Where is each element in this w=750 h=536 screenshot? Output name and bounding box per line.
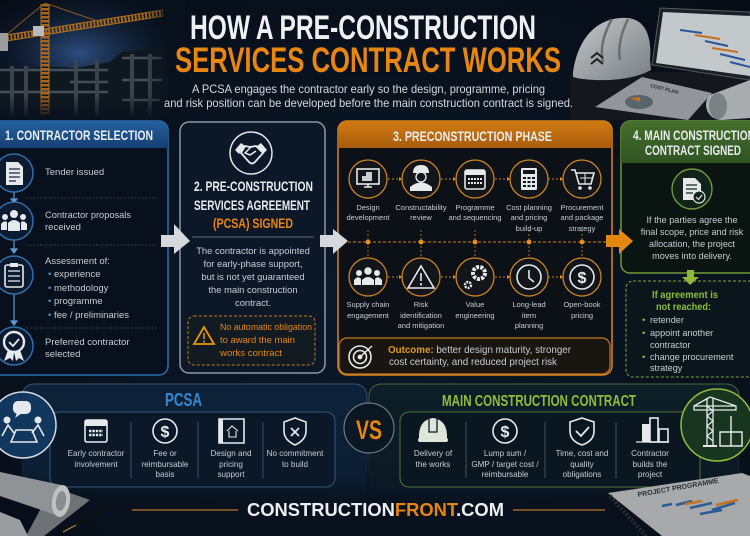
labels: PCSA features: Design and <box>211 449 251 458</box>
labels: upper row: build-up <box>516 224 542 233</box>
callout: no automatic obligation <box>188 316 315 365</box>
labels: PCSA features: No commitment <box>267 449 324 458</box>
icon: fee dollar: $ <box>161 424 170 441</box>
labels: lower row: Open-book <box>563 300 601 309</box>
labels: lower row: engagement <box>347 311 390 320</box>
panel: 2 PCSA signed <box>180 122 325 373</box>
subtitle: A PCSA engages the contractor early so the design, programme, pricing <box>192 82 545 96</box>
text: step list: • <box>48 269 51 280</box>
text: delivery description <box>641 215 744 261</box>
text: step list: Contractor proposals <box>45 210 131 221</box>
icon: calendar <box>456 160 494 198</box>
labels: upper row: development <box>347 213 390 222</box>
labels: upper row: Cost planning <box>506 203 552 212</box>
heading: PCSA signed: SERVICES AGREEMENT <box>194 197 310 213</box>
labels: main contract features: Time, cost and <box>556 449 608 458</box>
labels: main contract features: Lump sum / <box>484 449 527 458</box>
labels: PCSA features: support <box>218 470 245 479</box>
labels: lower row: item <box>522 311 536 320</box>
labels: PCSA features: basis <box>156 470 174 479</box>
footer: website: CONSTRUCTIONFRONT.COM <box>247 499 504 520</box>
labels: upper row: review <box>410 213 432 222</box>
text: step list: methodology <box>54 283 109 294</box>
callout: if agreement is not reached: contractor <box>650 340 690 350</box>
labels: main contract features: obligations <box>563 470 601 479</box>
text: step list: Tender issued <box>45 167 104 178</box>
heading: PCSA signed <box>194 178 313 231</box>
icon: award badge <box>0 327 33 365</box>
labels: lower row: and mitigation <box>398 321 444 330</box>
labels: main contract features: Contractor <box>631 449 669 458</box>
labels: upper row: and pricing <box>511 213 547 222</box>
icon: document <box>0 154 33 192</box>
text: step list: • <box>48 310 51 321</box>
icon: handshake <box>230 132 272 174</box>
text: step list: experience <box>54 269 100 280</box>
icon: risk triangle <box>402 258 440 296</box>
callout: if agreement is not reached: retender <box>650 315 684 325</box>
text: step list: selected <box>45 349 80 360</box>
panel: PCSA comparison <box>22 384 367 500</box>
callout: if agreement is not reached: • <box>642 315 645 326</box>
labels: upper row: Procurement <box>561 203 604 212</box>
arrow: preconstruction to main contract <box>606 229 633 254</box>
image: construction site with tower crane <box>0 0 190 119</box>
icon: lump sum dollar <box>493 419 517 443</box>
badge: VS <box>344 403 394 453</box>
text: step list: received <box>45 222 81 233</box>
labels: upper row: Constructability <box>395 203 447 212</box>
labels: lower row: pricing <box>571 311 593 320</box>
text: step list: Assessment of: <box>45 256 110 267</box>
callout: no automatic obligation: to award the main <box>220 335 295 346</box>
icon: blueprint <box>219 419 244 443</box>
text: delivery description: moves into delivery. <box>652 251 732 261</box>
labels: upper row: and sequencing <box>449 213 501 222</box>
text: PCSA description: the main construction <box>208 284 298 295</box>
title <box>175 9 561 80</box>
callout: if agreement is not reached <box>626 281 750 377</box>
icon: no commitment shield <box>284 418 306 445</box>
labels: lower row: engineering <box>455 311 495 320</box>
icon: design development <box>349 160 387 198</box>
panel: 3 preconstruction phase <box>338 121 612 375</box>
labels: main contract features: builds the <box>633 460 668 469</box>
icon: clipboard <box>0 256 33 294</box>
icon: buildings <box>636 418 669 442</box>
icon: early involvement calendar <box>85 420 107 442</box>
callout: if agreement is not reached: change procurement <box>650 352 734 362</box>
callout: if agreement is not reached: strategy <box>650 363 683 373</box>
icon: meeting around plans <box>0 392 56 458</box>
arrow: selection to PCSA <box>161 224 190 254</box>
icon: people <box>0 202 33 240</box>
icon: supply chain people <box>349 258 387 296</box>
callout: outcome: cost certainty, and reduced project risk <box>389 356 558 368</box>
text: step list: fee / preliminaries <box>54 310 129 321</box>
timeline: central dashed spine <box>338 177 606 279</box>
labels: main contract features: quality <box>570 460 595 469</box>
text: step list: Preferred contractor <box>45 337 129 348</box>
labels: lower row: identification <box>400 311 442 320</box>
icon: constructability review <box>402 160 440 198</box>
heading: main contract signed <box>633 128 750 158</box>
labels: main contract features: GMP / target cost / <box>471 460 539 469</box>
text: delivery description: allocation, the project <box>649 239 735 249</box>
image: hard hat, laptop and cost plan <box>570 8 750 120</box>
labels: lower row <box>347 300 601 330</box>
icon: crane and building <box>681 389 750 461</box>
heading: PCSA: PCSA <box>165 390 202 410</box>
icon: gears <box>456 258 494 296</box>
text: step list <box>45 167 131 360</box>
labels: lower row: planning <box>515 321 543 330</box>
subtitle: and risk position can be developed before the main construction contract is signed. <box>164 96 573 110</box>
labels: PCSA features: Fee or <box>153 449 177 458</box>
labels: upper row: strategy <box>569 224 596 233</box>
heading: PCSA signed: (PCSA) SIGNED <box>213 215 293 231</box>
callout: outcome <box>339 338 610 374</box>
callout: if agreement is not reached: • <box>642 328 645 339</box>
labels: lower row: Supply chain <box>347 300 389 309</box>
title: SERVICES CONTRACT WORKS <box>175 41 561 80</box>
icon: quality shield <box>570 418 594 445</box>
image: hard hat, laptop and cost plan: COST PLAN <box>650 83 679 96</box>
arrow: PCSA to preconstruction <box>320 229 348 254</box>
labels: PCSA features: reimbursable <box>142 460 189 469</box>
subtitle <box>164 82 573 110</box>
panel: 4 main construction contract signed <box>621 121 750 273</box>
labels: PCSA features: pricing <box>219 460 243 469</box>
icon: lump sum dollar: $ <box>501 424 510 441</box>
text: PCSA description <box>196 245 310 308</box>
labels: upper row: Programme <box>455 203 495 212</box>
callout: if agreement is not reached: appoint another <box>650 328 713 338</box>
image: project programme notebook <box>608 473 750 536</box>
icon: dollar: $ <box>578 270 587 287</box>
heading: preconstruction phase: 3. PRECONSTRUCTION PHASE <box>393 128 552 144</box>
icon: helmet <box>418 418 448 442</box>
text: PCSA description: for early-phase support, <box>203 258 303 269</box>
callout: if agreement is not reached: If agreement is <box>652 290 718 301</box>
labels: main contract features <box>414 449 669 479</box>
icon: calculator <box>510 160 548 198</box>
timeline connector <box>11 192 17 325</box>
labels: PCSA features: Early contractor <box>68 449 125 458</box>
labels: upper row <box>347 203 604 233</box>
panel: main construction contract comparison <box>369 384 739 500</box>
text: PCSA description: but is not yet guaranteed <box>201 271 305 282</box>
panel: 1 contractor selection <box>0 121 168 375</box>
labels: PCSA features: involvement <box>74 460 118 469</box>
text: step list: • <box>48 283 51 294</box>
text: delivery description: final scope, price and risk <box>641 227 744 237</box>
heading: PCSA signed: 2. PRE-CONSTRUCTION <box>194 178 313 194</box>
text: PCSA description: The contractor is appointed <box>196 245 310 256</box>
icon: clock <box>510 258 548 296</box>
icon: signed document <box>672 169 712 209</box>
image: project programme notebook: PROJECT PROGRAMME <box>637 478 719 499</box>
callout: no automatic obligation: No automatic obligation <box>220 322 312 333</box>
labels: main contract features: project <box>638 470 663 479</box>
labels: PCSA features: to build <box>282 460 308 469</box>
text: delivery description: If the parties agree the <box>646 215 738 225</box>
text: PCSA description: contract. <box>235 297 271 308</box>
text: step list: • <box>48 296 51 307</box>
icon: shopping cart <box>563 160 601 198</box>
image: rolled blueprints and pen <box>0 472 112 536</box>
callout: if agreement is not reached: • <box>642 352 645 363</box>
text: step list: programme <box>54 296 103 307</box>
labels: PCSA features <box>68 449 324 479</box>
callout: outcome: Outcome: better design maturity, stronger <box>388 344 571 356</box>
labels: lower row: Value <box>466 300 484 309</box>
labels: main contract features: reimbursable <box>482 470 529 479</box>
icon: target <box>349 346 372 368</box>
labels: main contract features: the works <box>416 460 450 469</box>
labels: main contract features: Delivery of <box>414 449 453 458</box>
icon: fee dollar <box>153 419 177 443</box>
title: HOW A PRE-CONSTRUCTION <box>190 9 536 47</box>
labels: upper row: and package <box>561 213 603 222</box>
callout: if agreement is not reached: not reached: <box>656 302 711 313</box>
heading: contractor selection: 1. CONTRACTOR SELECTION <box>5 127 153 143</box>
heading: main construction contract: MAIN CONSTRUCTION CONTRACT <box>442 393 636 410</box>
labels: lower row: Risk <box>414 300 429 309</box>
badge: VS: VS <box>356 415 382 445</box>
labels: lower row: Long-lead <box>512 300 546 309</box>
icon: dollar <box>563 258 601 296</box>
callout: no automatic obligation: works contract <box>219 348 282 359</box>
arrow: agreement down to fallback <box>682 270 699 285</box>
labels: upper row: Design <box>356 203 380 212</box>
